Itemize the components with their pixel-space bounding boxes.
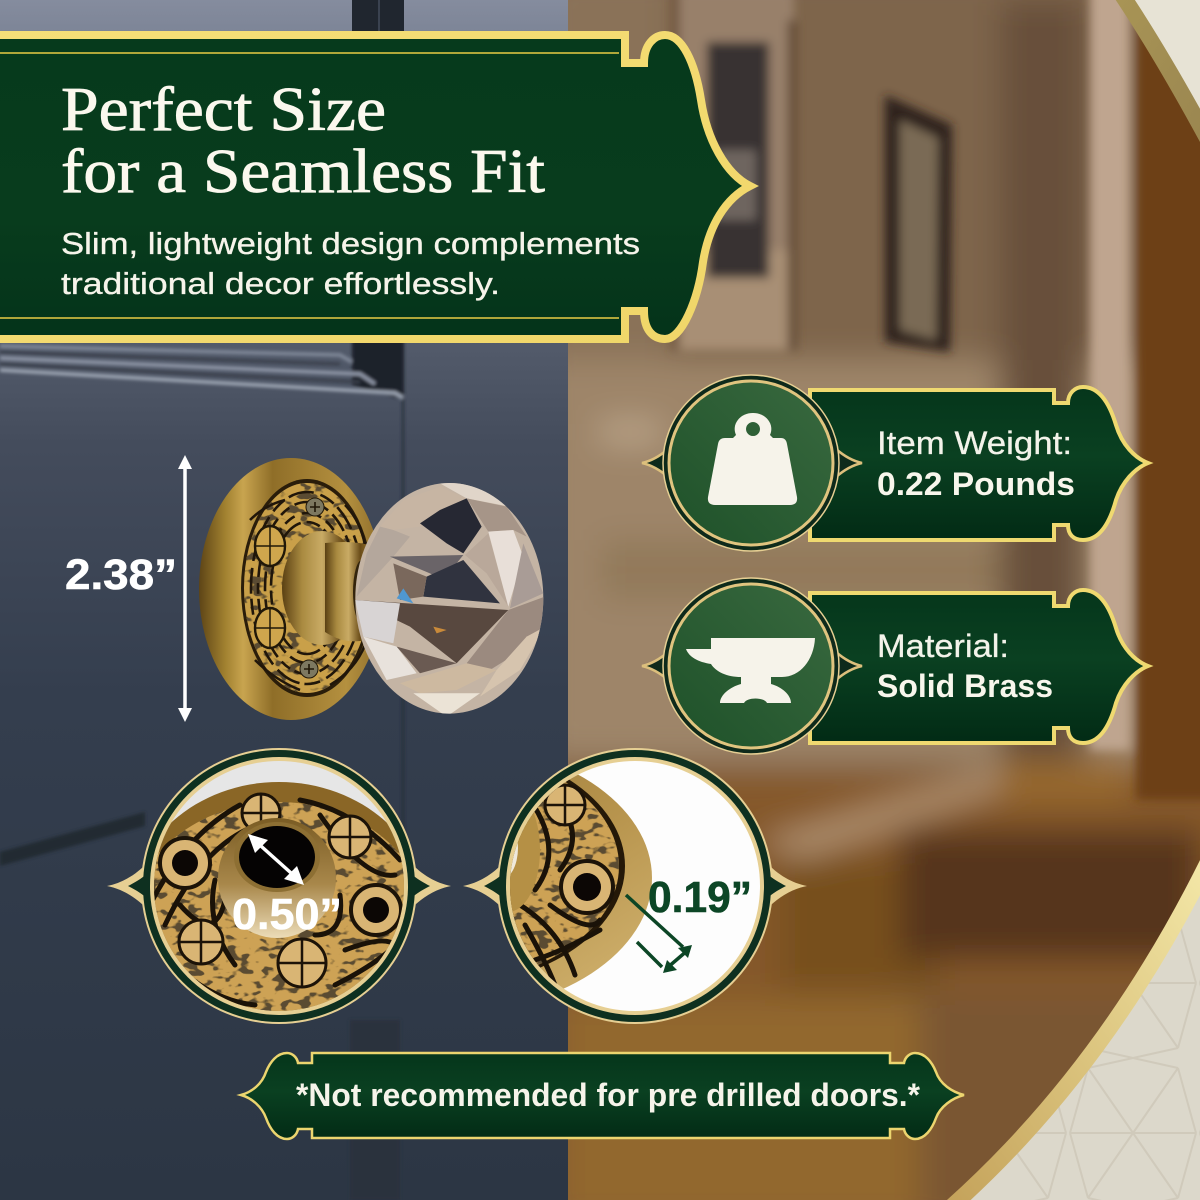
picture frame 2	[885, 95, 952, 352]
detail circle: 0.50 inch bore	[107, 748, 451, 1048]
medallion tips	[463, 862, 807, 910]
frame	[497, 748, 773, 1024]
banner	[810, 590, 1148, 743]
door knob with rosette	[199, 458, 553, 720]
dimension: 2.38 inch height	[65, 455, 192, 722]
info badge: item weight	[642, 375, 1148, 551]
dimension: 2.38 inch height: 2.38”	[65, 551, 177, 599]
heading: Perfect Size	[61, 76, 386, 144]
title banner: for a Seamless Fit	[61, 138, 545, 206]
icon: weight	[708, 413, 797, 505]
picture frame 1	[674, 0, 794, 350]
medallion tips	[107, 862, 451, 910]
info badge: material	[642, 578, 1148, 754]
gold arc band	[950, 0, 1200, 1200]
detail circle: 0.19 inch edge: 0.19”	[648, 873, 752, 922]
knob neck	[282, 531, 362, 645]
info badge: item weight: 0.22 Pounds	[877, 466, 1075, 502]
detail circle: 0.19 inch edge	[463, 748, 807, 1024]
bore arrow	[248, 834, 304, 885]
title banner	[0, 35, 750, 339]
detail circle: 0.50 inch bore: 0.50”	[232, 890, 342, 939]
info badge: material: Solid Brass	[877, 668, 1053, 704]
medallion tips	[642, 449, 862, 477]
material label: Material:	[877, 628, 1009, 664]
engraved rosette	[241, 479, 373, 697]
banner	[810, 387, 1148, 540]
note banner	[241, 1053, 964, 1139]
title banner: traditional decor effortlessly.	[61, 266, 500, 301]
medallion	[663, 578, 839, 754]
rosette plate	[199, 458, 383, 720]
weight label: Item Weight:	[877, 425, 1072, 461]
cream corner with geometric pattern	[950, 0, 1200, 1200]
icon: anvil	[686, 638, 815, 703]
subtitle: Slim, lightweight design complements	[61, 226, 640, 261]
note banner: *Not recommended for pre drilled doors.*	[296, 1077, 921, 1113]
door	[0, 0, 568, 1200]
frame	[141, 748, 417, 1024]
medallion tips	[642, 652, 862, 680]
edge measure	[626, 895, 688, 968]
medallion	[663, 375, 839, 551]
hallway background photo	[540, 0, 1200, 1200]
crystal knob	[355, 483, 544, 714]
